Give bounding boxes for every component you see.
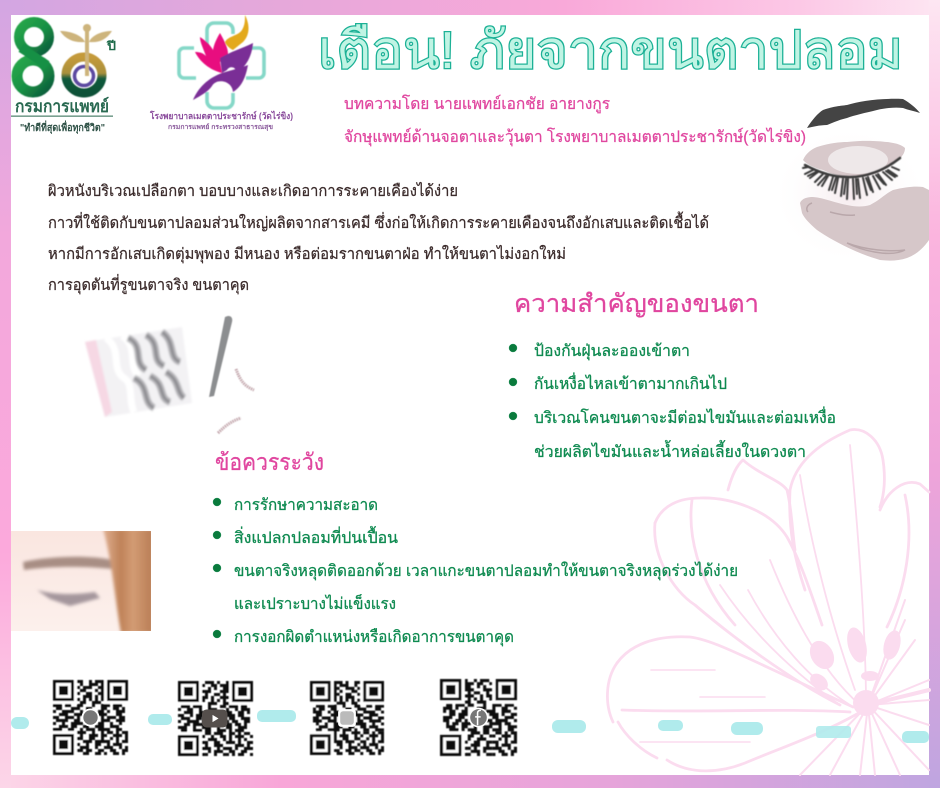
precaution 4: การงอกผิดตำแหน่งหรือเกิดอาการขนตาคุด (234, 628, 514, 647)
QR centre icon: play button (202, 710, 228, 728)
QR centre icon: chat (338, 709, 356, 727)
loose lashes (218, 369, 254, 433)
author name: บทความโดย นายแพทย์เอกชัย อายางกูร (344, 94, 610, 114)
under-eye patch (800, 187, 929, 261)
logo hospital name: โรงพยาบาลเมตตาประชารักษ์ (วัดไร่ขิง) (149, 110, 293, 121)
intro line 3: หากมีการอักเสบเกิดตุ่มพุพอง มีหนอง หรือต่อมรากขนตาฝ่อ ทำให้ขนตาไม่งอกใหม่ (48, 245, 566, 264)
logo: Metta Pracharak hospital (149, 15, 293, 131)
title: เตือน! ภัยจากขนตาปลอม (318, 22, 903, 80)
precaution 3 (213, 561, 738, 613)
heading: precautions: ข้อควรระวัง (215, 449, 324, 475)
list: importance of eyelashes (509, 342, 836, 461)
eyelid (803, 141, 905, 177)
logo teal cross (179, 23, 264, 108)
photo: closed eye with false lashes (11, 529, 153, 633)
eyebrow (807, 99, 920, 128)
illustration: closed eye with under-eye patch (770, 99, 930, 265)
bullet 3: ช่วยผลิตไขมันและน้ำหล่อเลี้ยงในดวงตา (534, 440, 806, 461)
bullet 2 (509, 372, 727, 393)
precaution 3: ขนตาจริงหลุดติดออกด้วย เวลาแกะขนตาปลอมทำให้ขนตาจริงหลุดร่วงได้ง่าย (234, 561, 738, 581)
intro paragraph (48, 182, 709, 295)
logo slogan: "ทำดีที่สุดเพื่อทุกชีวิต" (20, 120, 105, 134)
QR code: website (53, 680, 128, 755)
bullet 1: ป้องกันฝุ่นละอองเข้าตา (534, 342, 690, 361)
bullet 2: กันเหงื่อไหลเข้าตามากเกินไป (534, 372, 727, 393)
QR centre icon (82, 709, 99, 726)
lash rows (128, 332, 184, 408)
logo department name: กรมการแพทย์ (15, 96, 109, 116)
logo rule (11, 116, 113, 117)
illustration: false lashes and tweezers (85, 316, 254, 433)
cyan brush dashes (11, 710, 929, 743)
logo caduceus (60, 24, 112, 76)
photo hair (103, 529, 153, 633)
bullet 3: บริเวณโคนขนตาจะมีต่อมไขมันและต่อมเหงื่อ (534, 406, 836, 427)
QR code: LINE (310, 681, 384, 755)
lash box (85, 327, 192, 417)
precaution 3: และเปราะบางไม่แข็งแรง (234, 593, 396, 613)
logo ministry line: กรมการแพทย์ กระทรวงสาธารณสุข (168, 123, 273, 131)
precaution 2: สิ่งแปลกปลอมที่ปนเปื้อน (234, 526, 398, 547)
heading: importance of eyelashes: ความสำคัญของขนตา (514, 290, 759, 318)
intro line 4: การอุดตันที่รูขนตาจริง ขนตาคุด (48, 274, 249, 295)
author credit (344, 94, 806, 147)
bullet 3 (509, 406, 836, 461)
precaution 1: การรักษาความสะอาด (234, 497, 378, 514)
photo eyebrow (23, 557, 113, 570)
patch shading (807, 203, 905, 253)
logo year mark: ปี (106, 39, 116, 53)
list: precautions (213, 497, 738, 647)
logo lotus (193, 15, 253, 100)
QR centre icon: f (469, 708, 488, 727)
tweezers (209, 316, 232, 397)
intro line 2: กาวที่ใช้ติดกับขนตาปลอมส่วนใหญ่ผลิตจากสารเคมี ซึ่งก่อให้เกิดการระคายเคืองจนถึงอักเสบและติดเชื้อได้ (48, 211, 709, 232)
intro line 1: ผิวหนังบริเวณเปลือกตา บอบบางและเกิดอาการระคายเคืองได้ง่าย (48, 182, 458, 200)
lashes (803, 158, 900, 199)
photo lashes (37, 590, 100, 606)
logo: 80 years Department of Medical Services (11, 22, 116, 134)
author affiliation: จักษุแพทย์ด้านจอตาและวุ้นตา โรงพยาบาลเมตตาประชารักษ์(วัดไร่ขิง) (344, 127, 806, 147)
QR code: YouTube (178, 681, 253, 756)
QR code: Facebook (440, 679, 517, 756)
logo numeral 80 (17, 22, 102, 93)
decorative flower outline (607, 430, 929, 775)
